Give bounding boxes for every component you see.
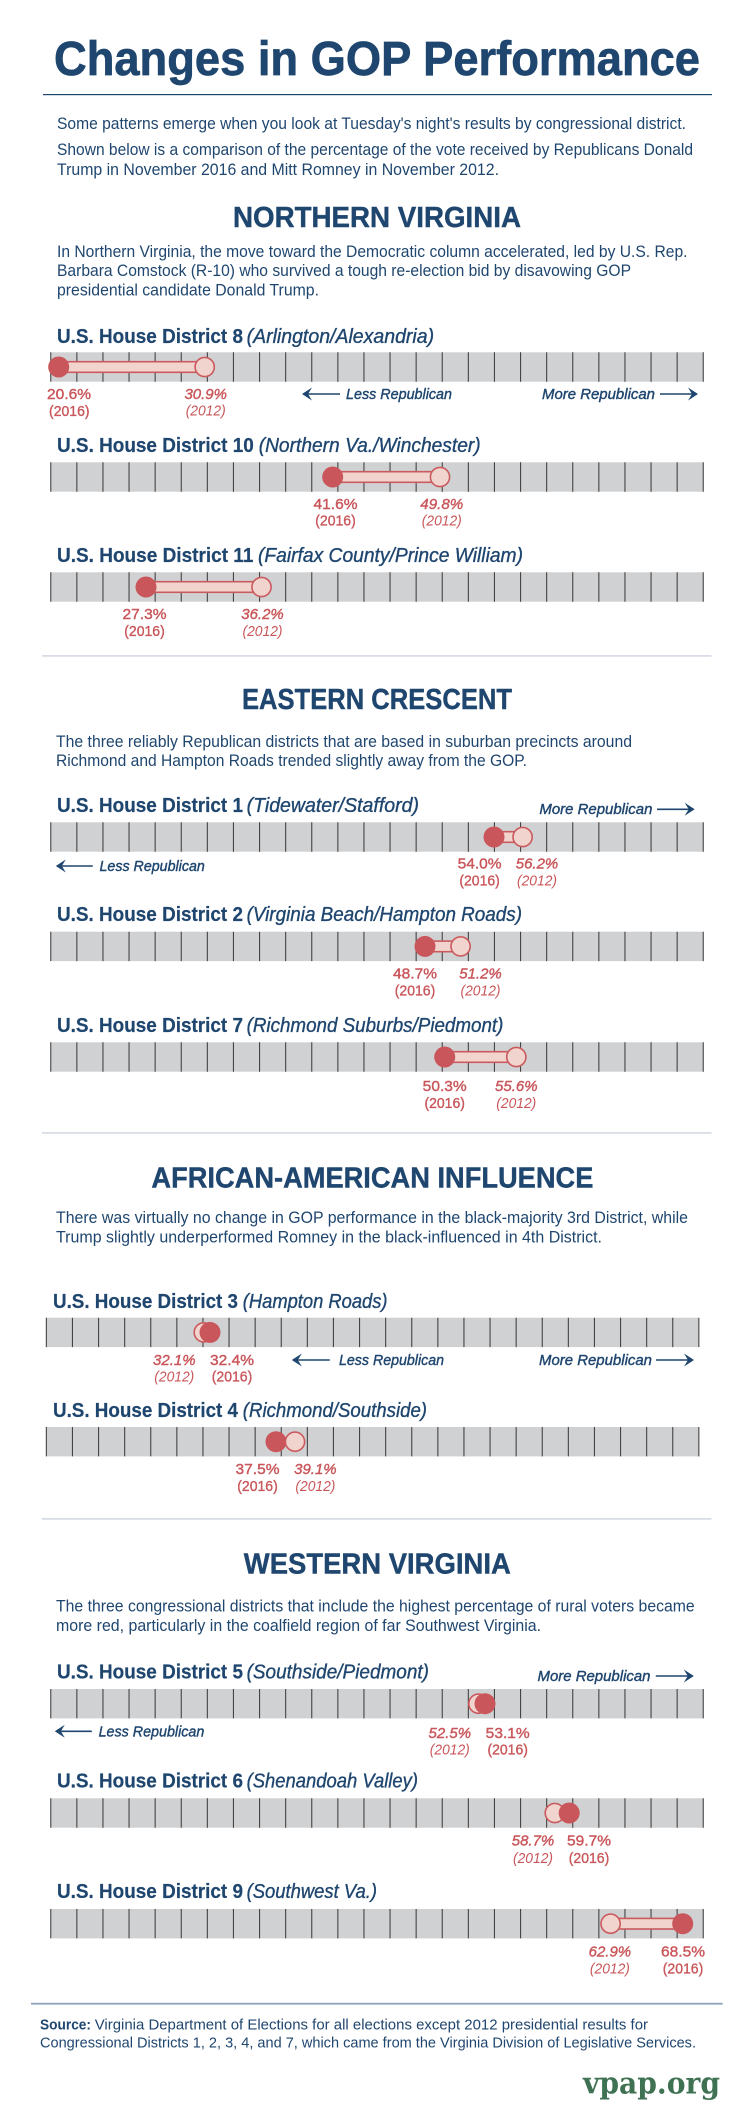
value: 20.6% 2016: 20.6% <box>47 386 91 403</box>
heading: African-American Influence: AFRICAN-AMERICAN INFLUENCE <box>151 1162 593 1194</box>
chart bar: district 11 <box>50 572 704 602</box>
heading: district 2: (Virginia Beach/Hampton Roads) <box>247 904 522 926</box>
value: 53.1% 2016 <box>486 1725 530 1758</box>
value: 53.1% 2016: (2016) <box>487 1742 528 1758</box>
arrow: more Republican: More Republican <box>539 1352 652 1369</box>
text: African-American Influence description <box>56 1209 688 1246</box>
value: 41.6% 2016: (2016) <box>315 514 356 530</box>
source note: Source: <box>40 2016 91 2033</box>
title: Changes in GOP Performance <box>54 33 700 86</box>
heading: district 1 <box>57 795 419 817</box>
arrow: less Republican: Less Republican <box>346 386 452 403</box>
value: 48.7% 2016: (2016) <box>395 984 435 1000</box>
heading: district 9: U.S. House District 9 <box>57 1881 243 1903</box>
heading: Western Virginia: WESTERN VIRGINIA <box>244 1548 511 1580</box>
value: 68.5% 2016: 68.5% <box>661 1944 705 1960</box>
value: 27.3% 2016: (2016) <box>124 624 165 640</box>
value: 59.7% 2016 <box>567 1832 611 1867</box>
value: 52.5% 2012 <box>429 1725 471 1758</box>
value: 30.9% 2012 <box>184 386 227 420</box>
arrow: less Republican: Less Republican <box>100 858 205 875</box>
value: 58.7% 2012: (2012) <box>513 1851 553 1867</box>
arrow: more Republican: More Republican <box>542 386 655 403</box>
heading: district 6: (Shenandoah Valley) <box>247 1770 418 1792</box>
value: 37.5% 2016: (2016) <box>237 1479 278 1495</box>
chart bar: district 9 <box>50 1909 704 1938</box>
value: 59.7% 2016: 59.7% <box>567 1832 611 1850</box>
panel: Western Virginia <box>50 1548 705 1978</box>
value: 59.7% 2016: (2016) <box>569 1851 609 1867</box>
heading: district 11 <box>57 545 523 567</box>
value: 49.8% 2012: (2012) <box>422 514 462 530</box>
heading: district 10: (Northern Va./Winchester) <box>259 435 481 457</box>
text: African-American Influence description: There was virtually no change in GOP performance in the black-majority 3rd District, while <box>56 1209 688 1227</box>
heading: district 5: (Southside/Piedmont) <box>247 1662 429 1684</box>
value: 20.6% 2016: (2016) <box>49 404 90 420</box>
chart bar: district 10 <box>50 462 704 492</box>
intro text <box>57 115 693 179</box>
value: 54.0% 2016: (2016) <box>459 874 500 890</box>
value: 55.6% 2012 <box>495 1078 538 1112</box>
district 3 <box>46 1291 700 1386</box>
intro text: Shown below is a comparison of the percentage of the vote received by Republicans Donald <box>57 141 693 159</box>
text: African-American Influence description: Trump slightly underperformed Romney in the black-influenced in 4th District. <box>56 1228 602 1246</box>
arrow: less Republican: Less Republican <box>339 1352 444 1369</box>
heading: district 1: U.S. House District 1 <box>57 795 243 817</box>
value: 32.4% 2016: 32.4% <box>210 1352 254 1369</box>
arrow: less Republican <box>56 858 205 875</box>
district 6 <box>50 1770 704 1867</box>
value: 51.2% 2012: (2012) <box>460 984 500 1000</box>
district 2 <box>50 904 704 1000</box>
district 1 <box>50 795 704 890</box>
heading: district 4 <box>53 1400 427 1422</box>
district 9 <box>50 1881 705 1978</box>
heading: Eastern Crescent: EASTERN CRESCENT <box>242 684 512 716</box>
value: 56.2% 2012: (2012) <box>517 874 557 890</box>
value: 53.1% 2016: 53.1% <box>486 1725 530 1742</box>
chart bar: district 7 <box>50 1042 704 1072</box>
heading: district 7: U.S. House District 7 <box>57 1015 243 1037</box>
text: Western Virginia description: more red, particularly in the coalfield region of far Southwest Virginia. <box>56 1617 541 1635</box>
heading: district 2: U.S. House District 2 <box>57 904 243 926</box>
arrow: more Republican: More Republican <box>538 1668 650 1685</box>
source note: Virginia Department of Elections for all elections except 2012 presidential results for <box>95 2016 648 2033</box>
value: 51.2% 2012 <box>459 966 502 1000</box>
district 7 <box>50 1015 704 1112</box>
value: 55.6% 2012: 55.6% <box>495 1078 538 1095</box>
value: 58.7% 2012: 58.7% <box>512 1832 554 1850</box>
text: Eastern Crescent description: The three reliably Republican districts that are based in suburban precincts around <box>56 733 632 751</box>
heading: district 11: (Fairfax County/Prince William) <box>258 545 523 567</box>
value: 48.7% 2016 <box>393 966 437 1000</box>
value: 32.1% 2012 <box>153 1352 196 1386</box>
heading: district 4: U.S. House District 4 <box>53 1400 239 1422</box>
heading: district 3: U.S. House District 3 <box>53 1291 238 1313</box>
heading: district 7: (Richmond Suburbs/Piedmont) <box>247 1015 503 1037</box>
heading: district 5: U.S. House District 5 <box>57 1662 243 1684</box>
text: Eastern Crescent description <box>56 733 632 770</box>
heading: Northern Virginia: NORTHERN VIRGINIA <box>233 202 521 234</box>
heading: district 3: (Hampton Roads) <box>243 1291 388 1313</box>
value: 39.1% 2012 <box>294 1461 337 1495</box>
text: Northern Virginia description <box>57 243 688 300</box>
chart bar: district 6 <box>50 1798 704 1828</box>
value: 49.8% 2012 <box>420 496 463 530</box>
district 4 <box>46 1400 700 1495</box>
heading: district 8: U.S. House District 8 <box>57 326 243 348</box>
district 8 <box>47 326 704 420</box>
value: 32.1% 2012: 32.1% <box>153 1352 196 1369</box>
value: 49.8% 2012: 49.8% <box>420 496 463 513</box>
value: 58.7% 2012 <box>512 1832 554 1867</box>
heading: district 6 <box>57 1770 418 1792</box>
heading: district 10 <box>57 435 481 457</box>
heading: district 9 <box>57 1881 377 1903</box>
intro text: Some patterns emerge when you look at Tuesday's night's results by congressional district. <box>57 115 686 133</box>
logo: vpap.org: vpap.org <box>582 2066 720 2101</box>
value: 50.3% 2016: (2016) <box>424 1096 465 1112</box>
value: 52.5% 2012: (2012) <box>430 1742 470 1758</box>
chart bar: district 5 <box>50 1689 704 1718</box>
arrow: more Republican: More Republican <box>539 801 652 818</box>
text: Northern Virginia description: presidential candidate Donald Trump. <box>57 282 319 300</box>
value: 36.2% 2012 <box>241 606 284 640</box>
value: 36.2% 2012: (2012) <box>242 624 282 640</box>
intro text: Trump in November 2016 and Mitt Romney in November 2012. <box>57 161 499 179</box>
heading: district 11: U.S. House District 11 <box>57 545 253 567</box>
chart bar: district 4 <box>46 1427 700 1456</box>
text: Northern Virginia description: Barbara Comstock (R-10) who survived a tough re-election bid by disavowing GOP <box>57 262 631 280</box>
value: 39.1% 2012: (2012) <box>295 1479 335 1495</box>
value: 54.0% 2016 <box>458 856 502 890</box>
arrow: less Republican <box>292 1352 444 1369</box>
chart bar: district 3 <box>46 1318 700 1347</box>
value: 30.9% 2012: 30.9% <box>184 386 227 403</box>
heading: district 1: (Tidewater/Stafford) <box>247 795 419 817</box>
heading: district 8: (Arlington/Alexandria) <box>247 326 434 348</box>
value: 62.9% 2012: 62.9% <box>589 1944 631 1960</box>
value: 62.9% 2012: (2012) <box>590 1962 630 1978</box>
heading: district 6: U.S. House District 6 <box>57 1770 243 1792</box>
heading: district 2 <box>57 904 522 926</box>
heading: district 4: (Richmond/Southside) <box>243 1400 427 1422</box>
value: 56.2% 2012 <box>516 856 558 890</box>
value: 41.6% 2016 <box>314 496 358 530</box>
arrow: less Republican: Less Republican <box>99 1724 204 1741</box>
district 10 <box>50 435 704 530</box>
value: 27.3% 2016: 27.3% <box>122 606 166 623</box>
heading: district 10: U.S. House District 10 <box>57 435 254 457</box>
value: 68.5% 2016 <box>661 1944 705 1978</box>
district 5 <box>50 1662 704 1758</box>
heading: district 5 <box>57 1662 429 1684</box>
heading: district 8 <box>57 326 434 348</box>
panel: Eastern Crescent <box>50 684 704 1112</box>
value: 50.3% 2016: 50.3% <box>423 1078 467 1095</box>
value: 37.5% 2016 <box>236 1461 280 1495</box>
value: 41.6% 2016: 41.6% <box>314 496 358 513</box>
value: 32.1% 2012: (2012) <box>154 1370 194 1386</box>
value: 51.2% 2012: 51.2% <box>459 966 502 982</box>
value: 27.3% 2016 <box>122 606 166 640</box>
arrow: less Republican <box>302 386 452 403</box>
source note <box>40 2016 696 2051</box>
value: 52.5% 2012: 52.5% <box>429 1725 471 1742</box>
value: 39.1% 2012: 39.1% <box>294 1461 337 1478</box>
heading: district 7 <box>57 1015 503 1037</box>
arrow: less Republican <box>55 1724 204 1741</box>
value: 37.5% 2016: 37.5% <box>236 1461 280 1478</box>
text: Northern Virginia description: In Northern Virginia, the move toward the Democratic column accelerated, led by U.S. Rep. <box>57 243 688 261</box>
panel: Northern Virginia <box>47 202 704 640</box>
source note: Congressional Districts 1, 2, 3, 4, and 7, which came from the Virginia Division of Legislative Services. <box>40 2034 696 2051</box>
chart bar: district 2 <box>50 932 704 961</box>
value: 30.9% 2012: (2012) <box>186 404 226 420</box>
heading: district 9: (Southwest Va.) <box>247 1881 377 1903</box>
chart bar: district 8 <box>48 352 704 382</box>
text: Eastern Crescent description: Richmond and Hampton Roads trended slightly away from the GOP. <box>56 752 527 770</box>
value: 32.4% 2016 <box>210 1352 254 1386</box>
value: 48.7% 2016: 48.7% <box>393 966 437 982</box>
value: 68.5% 2016: (2016) <box>663 1962 703 1978</box>
value: 62.9% 2012 <box>589 1944 631 1978</box>
heading: district 3 <box>53 1291 388 1313</box>
value: 50.3% 2016 <box>423 1078 467 1112</box>
value: 55.6% 2012: (2012) <box>496 1096 536 1112</box>
value: 54.0% 2016: 54.0% <box>458 856 502 872</box>
chart bar: district 1 <box>50 822 704 852</box>
value: 56.2% 2012: 56.2% <box>516 856 558 872</box>
value: 32.4% 2016: (2016) <box>212 1370 252 1386</box>
value: 36.2% 2012: 36.2% <box>241 606 284 623</box>
text: Western Virginia description: The three congressional districts that include the highest percentage of rural voters became <box>56 1598 695 1616</box>
panel: African-American Influence <box>46 1162 700 1495</box>
value: 20.6% 2016 <box>47 386 91 420</box>
text: Western Virginia description <box>56 1598 695 1635</box>
district 11 <box>50 545 704 640</box>
